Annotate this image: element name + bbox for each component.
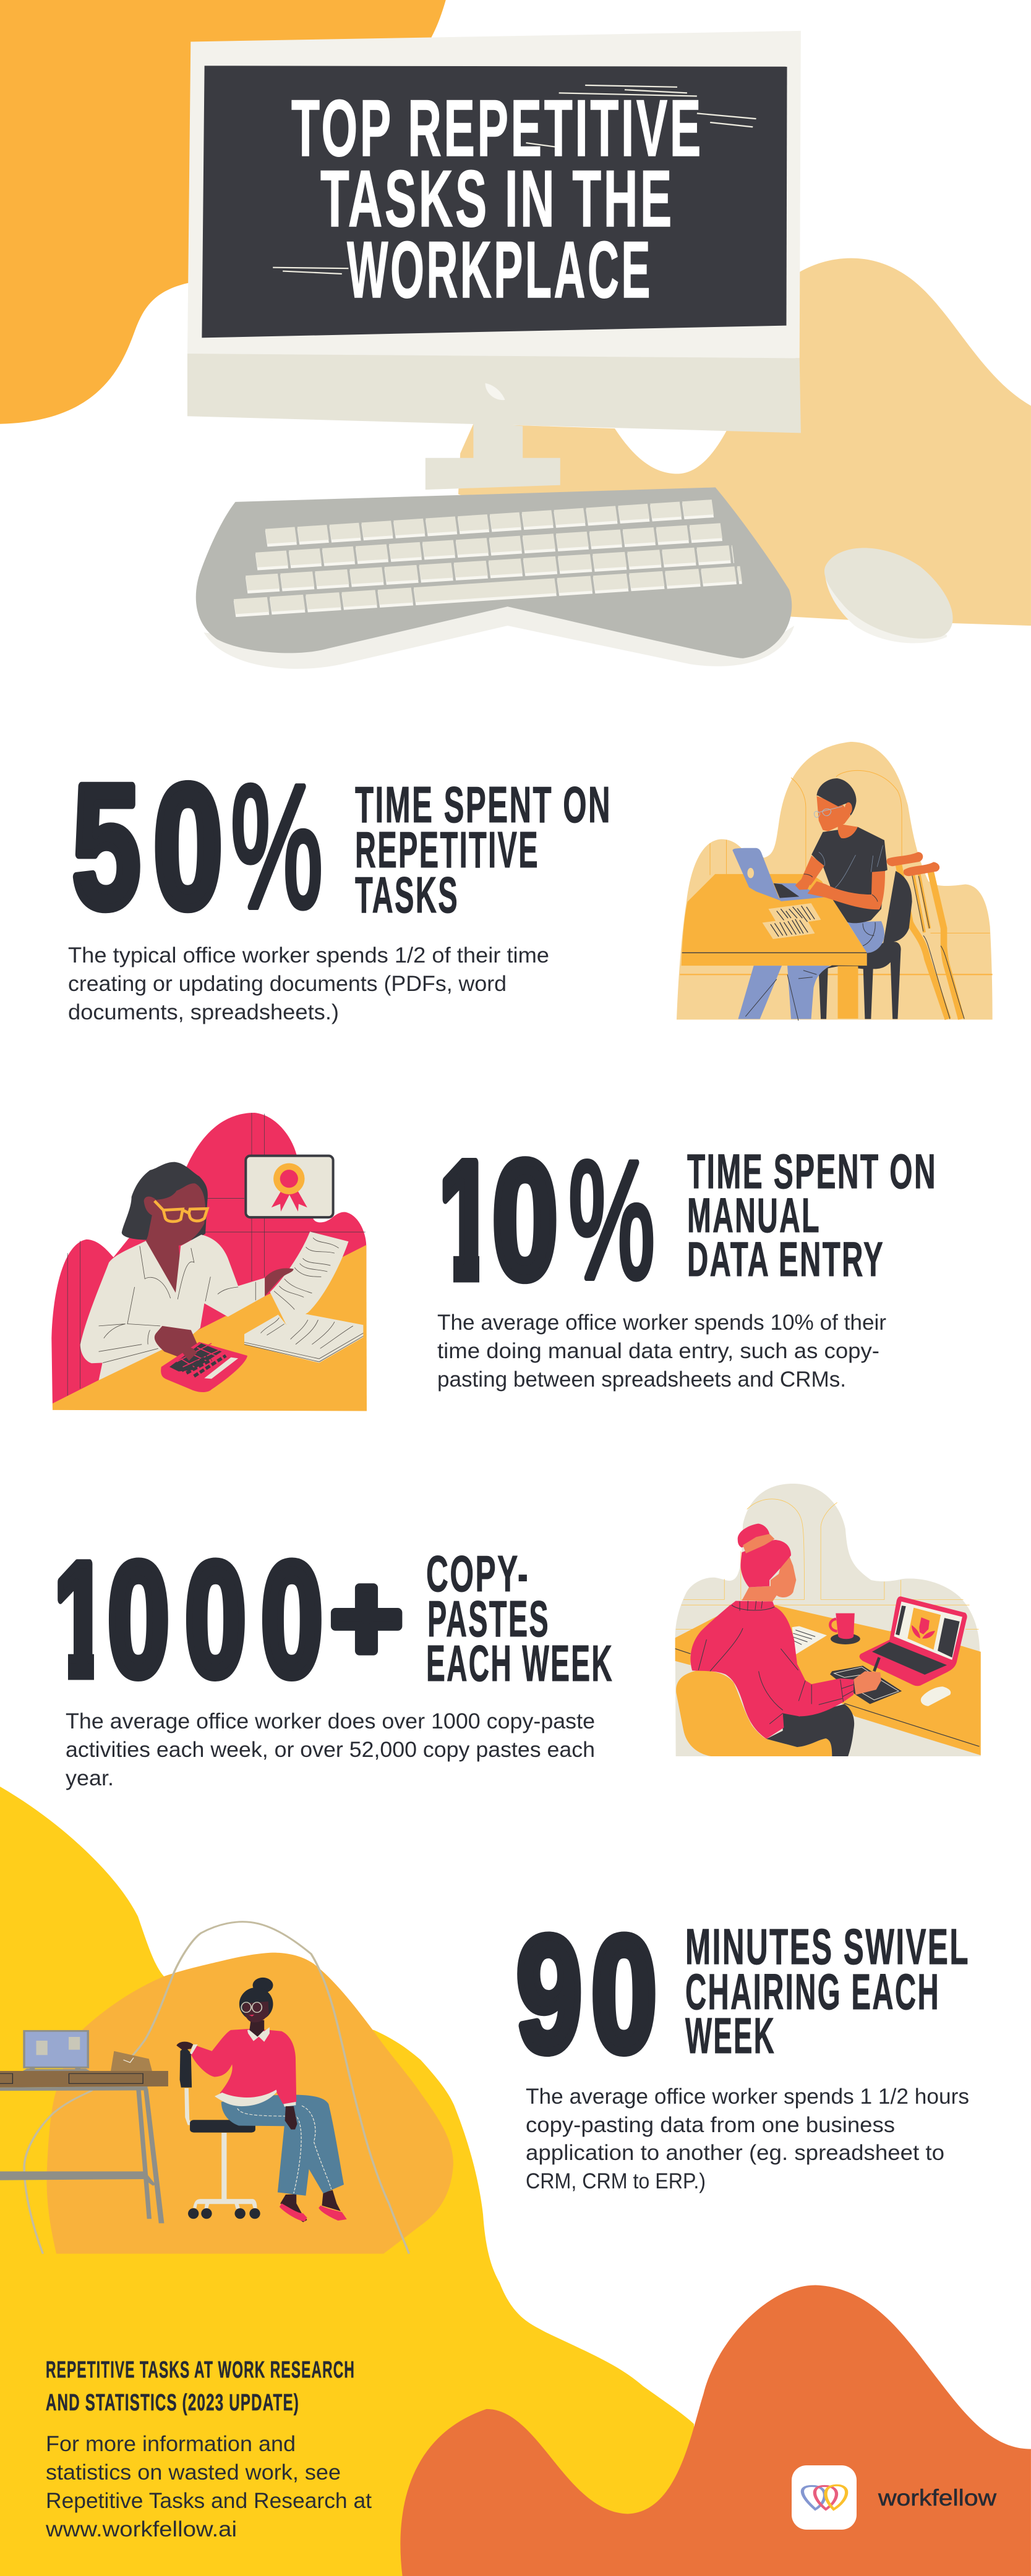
description: The average office worker spends 1 1/2 hours: [526, 2085, 969, 2109]
monitor bezel: [187, 31, 801, 358]
background blob: yellow lower left: [0, 1787, 694, 2576]
paper in hand: [270, 1231, 348, 1325]
head: [816, 796, 858, 838]
description: application to another (eg. spreadsheet to: [526, 2141, 944, 2165]
description: [68, 943, 549, 1024]
title: [291, 83, 703, 315]
chair: [819, 871, 912, 1019]
big number 90: 9: [516, 1903, 582, 2086]
glasses: [155, 1201, 207, 1222]
heading: copy-pastes each week: [426, 1545, 614, 1692]
calculator: [161, 1342, 247, 1392]
big number 90: 0: [591, 1903, 657, 2086]
screen scratches: [273, 85, 756, 274]
wordmark: workfellow: [878, 2485, 996, 2510]
jeans: [738, 921, 884, 1019]
big number 50%: [72, 749, 323, 944]
big number 50%: %: [231, 749, 323, 944]
description: The typical office worker spends 1/2 of their time: [68, 943, 549, 967]
tablet: [830, 1665, 902, 1704]
description: [437, 1311, 886, 1392]
background blob: dark orange lower right: [400, 2285, 1031, 2576]
footer text: Repetitive Tasks and Research at: [46, 2489, 372, 2513]
big number 90: [516, 1903, 657, 2086]
monitor chin: [187, 354, 801, 433]
papers: [763, 903, 821, 939]
logo mark: [802, 2485, 847, 2509]
big number 1000+: 0: [185, 1529, 246, 1710]
description: year.: [66, 1766, 114, 1790]
desk top: [0, 2071, 168, 2088]
hair: [738, 1524, 791, 1587]
footer: research heading and description: [45, 2357, 372, 2541]
illustration: desktop computer with title on screen: [187, 31, 953, 669]
illustration: woman on office chair by desk: [0, 1922, 453, 2254]
jeans: [221, 2095, 344, 2196]
laptop: [733, 848, 824, 901]
desk: [53, 1245, 367, 1411]
sweater: [690, 1601, 853, 1739]
keyboard body: [196, 487, 792, 658]
paper: [792, 1626, 827, 1655]
stat block: 10%: [438, 1154, 934, 1391]
heading: minutes swivel chairing each week: [685, 1919, 970, 2064]
desk: [675, 1605, 981, 1755]
shirt: [80, 1235, 265, 1380]
hair: [122, 1162, 208, 1240]
illustration: woman at laptop with tablet: [675, 1484, 981, 1756]
title: TASKS IN THE: [320, 153, 674, 244]
chair: [180, 2047, 260, 2219]
title: TOP REPETITIVE: [291, 83, 703, 173]
crutch pads: [887, 852, 939, 876]
desk: [682, 874, 867, 966]
torso: [811, 827, 888, 923]
big number 50%: 0: [153, 749, 223, 944]
footer text: [45, 2432, 372, 2541]
big number 1000+: +: [330, 1549, 403, 1687]
face and neck: [742, 1555, 796, 1602]
description: [66, 1709, 595, 1790]
mug: [830, 1613, 860, 1644]
description: pasting between spreadsheets and CRMs.: [437, 1367, 846, 1392]
big number 10%: [443, 1156, 653, 1285]
description: creating or updating documents (PDFs, word: [68, 972, 507, 996]
amber backdrop: [47, 1953, 453, 2254]
big number 10%: 1: [438, 1127, 494, 1314]
footer heading: [46, 2357, 355, 2416]
peach backdrop: [677, 742, 993, 1019]
box on desk: [111, 2051, 152, 2071]
description: [526, 2085, 969, 2193]
arms: [795, 856, 885, 909]
heading: time spent on manual data entry: [687, 1144, 937, 1286]
mouse: [921, 1686, 951, 1706]
heading: time spent on repetitive tasks: TASKS: [355, 866, 459, 924]
footer text: statistics on wasted work, see: [46, 2460, 341, 2485]
heading: time spent on repetitive tasks: REPETITIVE: [355, 821, 539, 878]
heading: copy-pastes each week: COPY-: [426, 1545, 529, 1602]
book: [244, 1314, 363, 1363]
crutches: [899, 865, 961, 1019]
heading: time spent on manual data entry: DATA ENTRY: [687, 1231, 884, 1286]
stat block: 1000+: [58, 1555, 612, 1790]
monitor stand: [426, 422, 560, 490]
hands: [155, 1269, 294, 1361]
description: The average office worker does over 1000 copy-paste: [66, 1709, 595, 1733]
footer heading: REPETITIVE TASKS AT WORK RESEARCH: [46, 2357, 355, 2383]
scrunchie: [743, 1534, 774, 1554]
big number 1000+: 1: [54, 1529, 108, 1710]
big number 10%: %: [568, 1127, 655, 1314]
hands and neck: [176, 2020, 297, 2130]
certificate: [246, 1156, 333, 1217]
heading: time spent on manual data entry: MANUAL: [687, 1188, 821, 1243]
description: The average office worker spends 10% of their: [437, 1311, 886, 1335]
thin arc outline: [24, 1922, 409, 2254]
logo tile: [792, 2465, 857, 2530]
face and neck: [144, 1183, 205, 1293]
big number 1000+: 0: [108, 1529, 169, 1710]
big number 50%: 5: [72, 749, 140, 944]
big number 1000+: [58, 1558, 402, 1681]
laptop on desk: [23, 2031, 90, 2071]
monitor logo: [486, 383, 505, 400]
big number 1000+: 0: [261, 1529, 323, 1710]
big number 10%: 0: [492, 1127, 558, 1314]
head: [239, 1978, 273, 2022]
desk legs: [0, 2089, 164, 2223]
keyboard shadow texture: [204, 606, 794, 669]
stat block: 50%: [68, 749, 612, 1024]
heading: minutes swivel chairing each week: WEEK: [685, 2008, 776, 2064]
logo: workfellow: [792, 2465, 996, 2530]
footer text: For more information and: [46, 2432, 296, 2456]
illustration: woman with calculator and certificate: [51, 1113, 367, 1411]
pink backdrop: [51, 1113, 366, 1408]
footer text: www.workfellow.ai: [45, 2517, 237, 2541]
legs and shoes: [280, 2190, 341, 2222]
heading: time spent on repetitive tasks: TIME SPENT ON: [355, 776, 612, 833]
illustration: man with laptop and crutches: [677, 742, 993, 1021]
heading: copy-pastes each week: EACH WEEK: [426, 1634, 614, 1692]
background blob: orange top left: [0, 0, 446, 424]
monitor screen: [202, 66, 787, 338]
description: activities each week, or over 52,000 copy pastes each: [66, 1738, 595, 1762]
keyboard keys: [235, 507, 741, 609]
description: CRM, CRM to ERP.): [526, 2169, 706, 2193]
cream backdrop: [675, 1484, 981, 1756]
laptop: [860, 1596, 967, 1686]
title: WORKPLACE: [347, 224, 652, 315]
stat block: 90 minutes: [516, 1903, 970, 2193]
heading: copy-pastes each week: PASTES: [427, 1590, 550, 1647]
footer heading: AND STATISTICS (2023 UPDATE): [46, 2390, 299, 2416]
mouse: [825, 567, 947, 643]
chair: [676, 1670, 832, 1756]
sweater: [191, 2029, 296, 2104]
trousers: [766, 1704, 854, 1756]
description: documents, spreadsheets.): [68, 1000, 339, 1024]
heading: time spent on repetitive tasks: [355, 776, 612, 924]
hand and pen: [874, 1657, 879, 1671]
description: time doing manual data entry, such as copy-: [437, 1339, 879, 1363]
description: copy-pasting data from one business: [526, 2113, 895, 2137]
background blob: peach behind monitor: [458, 258, 1031, 626]
